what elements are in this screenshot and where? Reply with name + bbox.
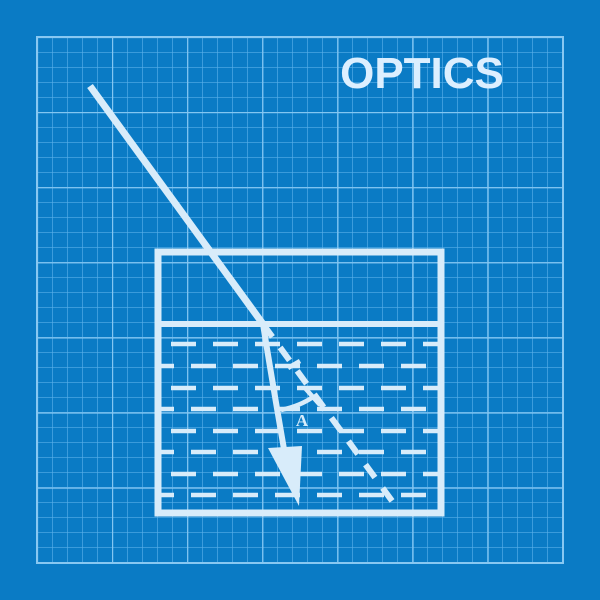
title: OPTICS <box>340 49 504 98</box>
label A: A <box>296 411 309 430</box>
angle marker <box>281 361 320 410</box>
container: water tank <box>158 252 441 513</box>
refracted ray <box>263 324 302 506</box>
incident ray <box>90 86 263 324</box>
water dashes <box>161 344 438 495</box>
dashed continuation <box>263 324 395 505</box>
